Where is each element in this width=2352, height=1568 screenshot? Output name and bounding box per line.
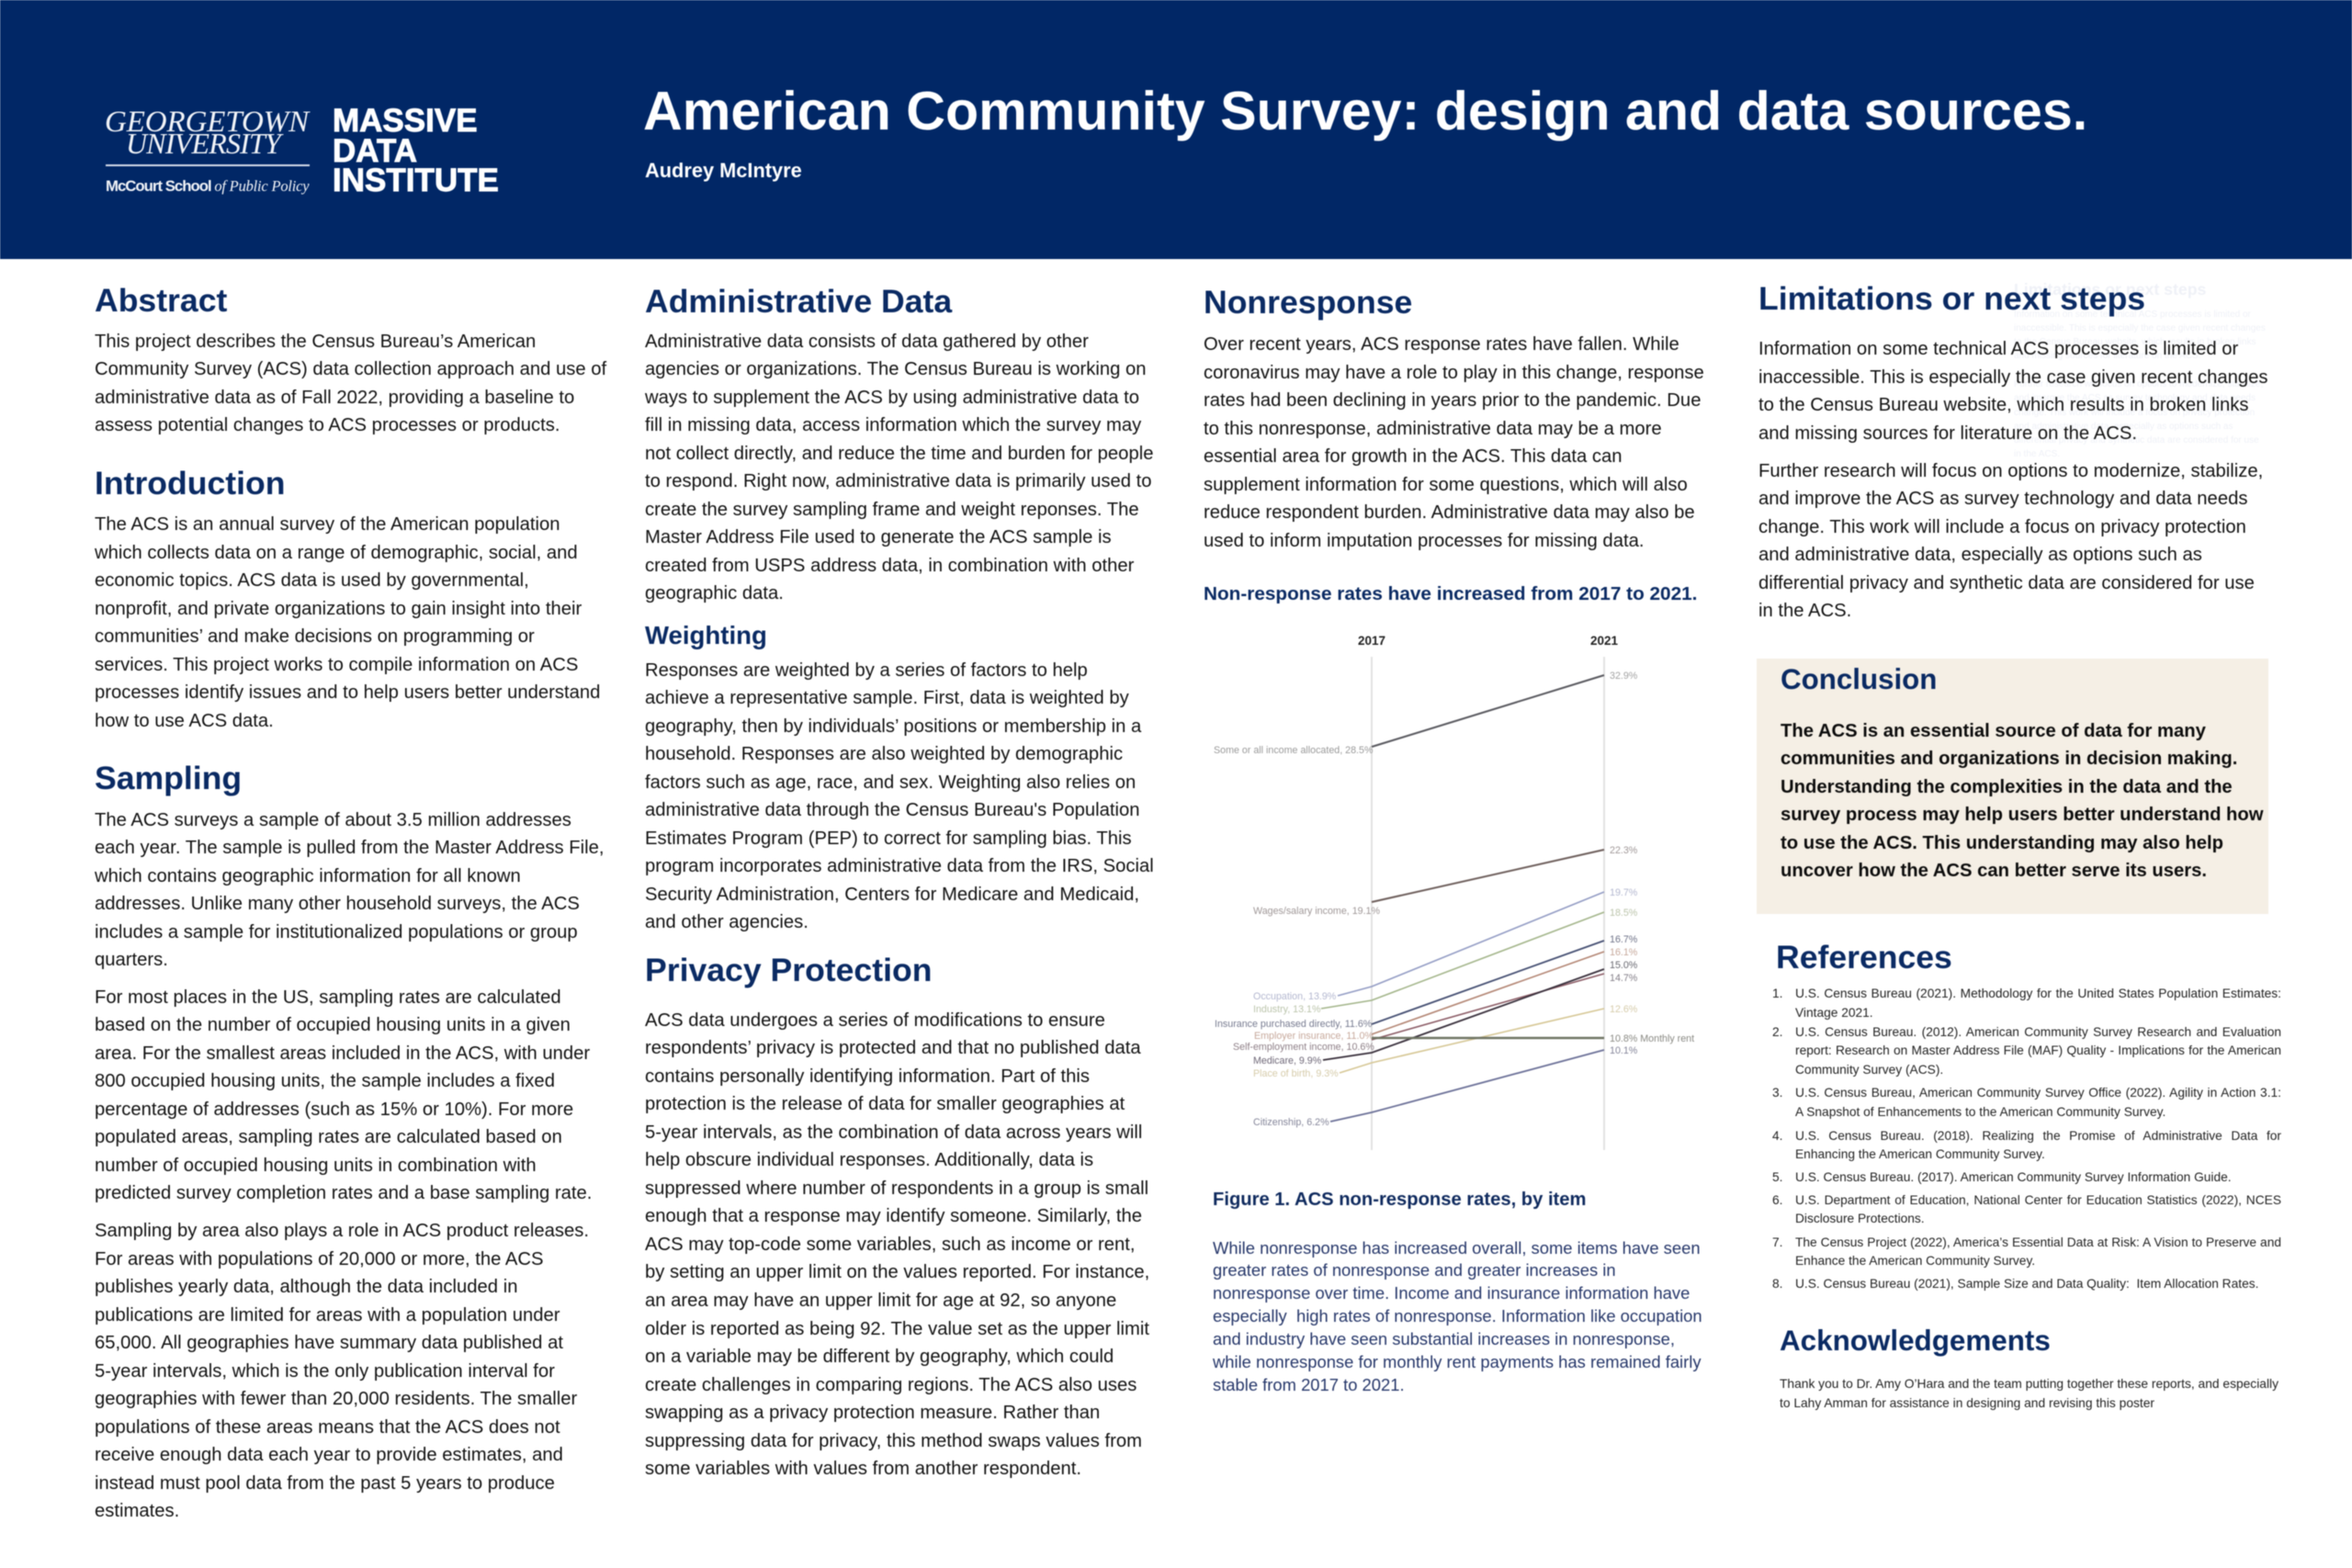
reference 2: 2.: [1772, 1025, 1782, 1038]
chart heading: Non-response rates have increased from 2017 to 2021.: [1204, 583, 1697, 604]
text: abstract: administrative data as of Fall 2022, providing a baseline to: [95, 388, 574, 408]
reference 6: Disclosure Protections.: [1795, 1212, 1925, 1225]
reference 2: U.S. Census Bureau. (2012). American Community Survey Research and Evaluation: [1795, 1025, 2281, 1038]
text: privacy protection: suppressed where number of respondents in a group is small: [645, 1179, 1148, 1199]
text: nonresponse: supplement information for some questions, which will also: [1204, 475, 1688, 495]
text: sampling paragraph 1: which contains geographic information for all known: [95, 866, 521, 886]
text: sampling paragraph 3: populations of these areas means that the ACS does not: [95, 1417, 560, 1438]
text: nonresponse: [1204, 334, 1704, 551]
text: conclusion: communities and organizations in decision making.: [1781, 749, 2237, 769]
text: conclusion: Understanding the complexities in the data and the: [1781, 777, 2233, 797]
text: limitations paragraph 2: differential privacy and synthetic data are considered for use: [1758, 573, 2255, 593]
text: administrative data: agencies or organizations. The Census Bureau is working on: [645, 359, 1147, 379]
reference 7: [1772, 1235, 2281, 1269]
heading: Conclusion: Conclusion: [1781, 663, 1937, 695]
text: privacy protection: enough that a response may identify someone. Similarly, the: [645, 1206, 1142, 1226]
series: occupation: Occupation, 13.9%: [1253, 991, 1337, 1002]
heading: Abstract: Abstract: [95, 282, 227, 319]
text: introduction: how to use ACS data.: [95, 711, 274, 731]
text: nonresponse: to this nonresponse, administrative data may be a more: [1204, 419, 1662, 439]
text: sampling paragraph 1: addresses. Unlike many other household surveys, the ACS: [95, 894, 580, 914]
reference 1: U.S. Census Bureau (2021). Methodology for the United States Population Estimates:: [1795, 987, 2281, 1000]
heading: Acknowledgements: Acknowledgements: [1780, 1325, 2051, 1357]
series: some or all income allocated: [1214, 671, 1638, 756]
text: acknowledgements: [1779, 1377, 2278, 1411]
text: weighting: administrative data through the Census Bureau's Population: [645, 800, 1140, 820]
text: administrative data: geographic data.: [645, 583, 784, 604]
series: self-employment income: [1233, 973, 1638, 1053]
faint ghost text behind limitations: and administrative data, especially as options such as: [2014, 422, 2233, 432]
faint ghost text behind limitations: Information on some technical ACS processes is limited or: [2014, 309, 2251, 320]
text: privacy protection: respondents’ privacy is protected and that no published data: [645, 1038, 1141, 1058]
text: conclusion: [1780, 720, 2264, 881]
text: introduction: processes identify issues and to help users better understand: [95, 682, 600, 703]
text: sampling paragraph 3: receive enough data each year to provide estimates, and: [95, 1445, 563, 1465]
slope chart: non-response rates 2017 to 2021: 2021: [1590, 634, 1619, 648]
series: occupation: 19.7%: [1610, 887, 1638, 898]
text: weighting: Responses are weighted by a series of factors to help: [645, 660, 1088, 680]
text: sampling paragraph 2: 800 occupied housing units, the sample includes a fixed: [95, 1071, 555, 1091]
faint ghost text behind limitations: and improve the ACS as survey technology and data needs: [2014, 393, 2256, 403]
text: conclusion: uncover how the ACS can better serve its users.: [1781, 861, 2207, 881]
text: administrative data: fill in missing data, access information which the survey may: [645, 415, 1141, 435]
series: place of birth: 12.6%: [1610, 1004, 1638, 1015]
heading: Sampling: Sampling: [95, 760, 242, 796]
series: employer insurance: Employer insurance, 11.0%: [1254, 1031, 1374, 1042]
heading: Privacy Protection: Privacy Protection: [645, 952, 932, 988]
text: introduction: nonprofit, and private organizations to gain insight into their: [95, 599, 582, 619]
logo: Massive Data Institute: MASSIVE: [333, 103, 478, 139]
text: sampling paragraph 3: instead must pool data from the past 5 years to produce: [95, 1473, 555, 1494]
text: limitations paragraph 1: and missing sources for literature on the ACS.: [1758, 423, 2137, 444]
text: nonresponse: Over recent years, ACS response rates have fallen. While: [1204, 334, 1679, 355]
text: sampling paragraph 3: [95, 1221, 589, 1521]
text: weighting: and other agencies.: [645, 912, 808, 932]
text: sampling paragraph 3: publishes yearly data, although the data included in: [95, 1277, 517, 1297]
series: employer insurance: [1254, 947, 1638, 1042]
panel: conclusion: [1757, 659, 2268, 914]
reference 1: 1.: [1772, 987, 1782, 1000]
series: employer insurance: 16.1%: [1610, 947, 1638, 958]
text: conclusion: survey process may help users better understand how: [1781, 805, 2264, 825]
series: wages/salary income: [1253, 845, 1638, 917]
text: introduction: which collects data on a range of demographic, social, and: [95, 543, 578, 563]
text: sampling paragraph 2: populated areas, sampling rates are calculated based on: [95, 1127, 562, 1147]
text: introduction: economic topics. ACS data is used by governmental,: [95, 570, 529, 591]
reference 3: [1772, 1086, 2281, 1120]
series: self-employment income: Self-employment income, 10.6%: [1233, 1042, 1374, 1053]
series: some or all income allocated: 32.9%: [1610, 671, 1638, 682]
text: weighting: Security Administration, Centers for Medicare and Medicaid,: [645, 885, 1139, 905]
reference 5: U.S. Census Bureau. (2017). American Community Survey Information Guide.: [1795, 1170, 2232, 1184]
series: place of birth: Place of birth, 9.3%: [1253, 1068, 1339, 1079]
reference 2: report: Research on Master Address File (MAF) Quality - Implications for the American: [1795, 1043, 2281, 1057]
reference 3: U.S. Census Bureau, American Community Survey Office (2022). Agility in Action 3.1:: [1795, 1086, 2281, 1100]
text: sampling paragraph 1: each year. The sample is pulled from the Master Address File,: [95, 838, 605, 858]
reference 4: Enhancing the American Community Survey.: [1795, 1147, 2045, 1161]
figure caption: Figure 1. ACS non-response rates, by item: [1213, 1190, 1586, 1210]
reference 7: The Census Project (2022), America’s Essential Data at Risk: A Vision to Preserve and: [1795, 1235, 2281, 1249]
text: nonresponse: rates had been declining in years prior to the pandemic. Due: [1204, 390, 1701, 411]
text: sampling paragraph 3: For areas with populations of 20,000 or more, the ACS: [95, 1249, 544, 1269]
reference 3: 3.: [1772, 1086, 1782, 1100]
text: sampling paragraph 1: quarters.: [95, 950, 168, 970]
series: insurance purchased directly: Insurance purchased directly, 11.6%: [1215, 1019, 1373, 1030]
text: privacy protection: ACS may top-code some variables, such as income or rent,: [645, 1235, 1135, 1255]
reference 4: U.S. Census Bureau. (2018). Realizing the Promise of Administrative Data for: [1795, 1128, 2281, 1143]
logo: Georgetown University McCourt School: GEORGETOWN: [105, 106, 309, 139]
reference 6: 6.: [1772, 1192, 1782, 1207]
title: American Community Survey: design and data sources.: [643, 80, 2087, 141]
heading: Nonresponse: Nonresponse: [1204, 284, 1412, 321]
text: limitations paragraph 1: [1758, 339, 2268, 444]
text: acknowledgements: to Lahy Amman for assistance in designing and revising this poster: [1780, 1396, 2154, 1410]
text: sampling paragraph 1: includes a sample for institutionalized populations or group: [95, 922, 578, 942]
faint ghost text behind limitations: Further research will focus on options to modernize, stabilize,: [2014, 379, 2263, 389]
series: place of birth: [1253, 1004, 1638, 1079]
text: sampling paragraph 2: area. For the smallest areas included in the ACS, with under: [95, 1043, 590, 1064]
text: abstract: [94, 331, 607, 435]
text: administrative data: Administrative data consists of data gathered by other: [645, 331, 1089, 351]
text: privacy protection: suppressing data for privacy, this method swaps values from: [645, 1431, 1142, 1451]
reference 8: 8.: [1772, 1277, 1782, 1290]
author: Audrey McIntyre: [645, 158, 802, 182]
text: sampling paragraph 1: The ACS surveys a sample of about 3.5 million addresses: [95, 810, 571, 830]
reference 3: A Snapshot of Enhancements to the American Community Survey.: [1795, 1105, 2165, 1119]
reference 1: Vintage 2021.: [1795, 1006, 1873, 1020]
faint ghost text behind limitations: Limitations or next steps: [2014, 280, 2206, 299]
text: limitations paragraph 1: Information on some technical ACS processes is limited or: [1758, 339, 2238, 359]
series: medicare: Medicare, 9.9%: [1253, 1055, 1322, 1066]
text: conclusion: to use the ACS. This understanding may also help: [1781, 833, 2223, 853]
faint ghost text behind limitations: to the Census Bureau website, which results in broken links: [2014, 337, 2256, 347]
reference 4: 4.: [1772, 1128, 1782, 1143]
heading: Limitations or next steps: Limitations or next steps: [1758, 280, 2145, 317]
logo: Massive Data Institute: DATA: [333, 132, 417, 169]
text: weighting: household. Responses are also weighted by demographic: [645, 744, 1123, 764]
faint ghost text behind limitations: [2014, 280, 2266, 459]
faint ghost text behind limitations: differential privacy and synthetic data are considered for use: [2014, 435, 2259, 446]
series: medicare: 15.0%: [1610, 960, 1638, 971]
text: sampling paragraph 3: 5-year intervals, which is the only publication interval for: [95, 1361, 555, 1382]
heading: References: References: [1776, 939, 1952, 976]
text: conclusion: The ACS is an essential source of data for many: [1781, 720, 2206, 740]
series: occupation: [1253, 887, 1638, 1002]
text: administrative data: to respond. Right now, administrative data is primarily used to: [645, 471, 1152, 491]
series: self-employment income: 14.7%: [1610, 973, 1638, 984]
text: privacy protection: contains personally identifying information. Part of this: [645, 1066, 1090, 1087]
text: sampling paragraph 3: geographies with fewer than 20,000 residents. The smaller: [95, 1389, 577, 1409]
logo: Massive Data Institute: [333, 103, 499, 198]
text: sampling paragraph 3: 65,000. All geographies have summary data published at: [95, 1333, 563, 1353]
slope chart: non-response rates 2017 to 2021: [1214, 634, 1694, 1150]
text: limitations paragraph 1: inaccessible. This is especially the case given recent changes: [1758, 367, 2268, 388]
reference 5: 5.: [1772, 1170, 1782, 1184]
text: limitations paragraph 2: in the ACS.: [1758, 601, 1851, 621]
text: administrative data: [644, 331, 1154, 604]
series: insurance purchased directly: [1215, 934, 1638, 1030]
heading: Administrative Data: Administrative Data: [645, 283, 952, 320]
series: industry: [1253, 908, 1638, 1015]
text: introduction: The ACS is an annual survey of the American population: [95, 514, 560, 535]
heading: Weighting: Weighting: [645, 621, 767, 649]
text: privacy protection: on a variable may be different by geography, which could: [645, 1347, 1114, 1367]
text: privacy protection: some variables with values from another respondent.: [645, 1459, 1081, 1479]
text: abstract: This project describes the Census Bureau’s American: [95, 331, 536, 351]
text: limitations paragraph 2: and administrative data, especially as options such as: [1758, 545, 2202, 565]
reference 6: [1771, 1192, 2282, 1225]
logo: Georgetown University McCourt School: McCourt School of Public Policy: [106, 177, 309, 195]
text: privacy protection: by setting an upper limit on the values reported. For instance,: [645, 1262, 1149, 1282]
text: introduction: communities’ and make decisions on programming or: [95, 626, 535, 647]
text: administrative data: created from USPS address data, in combination with other: [645, 556, 1134, 576]
text: sampling paragraph 2: For most places in the US, sampling rates are calculated: [95, 987, 561, 1007]
text: weighting: achieve a representative sample. First, data is weighted by: [645, 688, 1129, 708]
text: sampling paragraph 2: [95, 987, 592, 1203]
logo: Georgetown University McCourt School: UNIVERSITY: [126, 127, 280, 160]
faint ghost text behind limitations: and missing sources for literature on the ACS.: [2014, 351, 2200, 361]
text: sampling paragraph 3: publications are limited for areas with a population under: [95, 1305, 560, 1325]
text: administrative data: create the survey sampling frame and weight reponses. The: [645, 500, 1139, 520]
text: introduction: services. This project works to compile information on ACS: [95, 655, 578, 675]
text: sampling paragraph 2: based on the number of occupied housing units in a given: [95, 1015, 571, 1035]
text: limitations paragraph 2: change. This work will include a focus on privacy protection: [1758, 517, 2246, 537]
reference 2: Community Survey (ACS).: [1795, 1063, 1943, 1077]
text: administrative data: Master Address File used to generate the ACS sample is: [645, 527, 1112, 547]
text: weighting: geography, then by individuals’ positions or membership in a: [645, 716, 1141, 737]
text: privacy protection: an area may have an upper limit for age at 92, so anyone: [645, 1291, 1116, 1311]
series: wages/salary income: 22.3%: [1610, 845, 1638, 856]
text: abstract: Community Survey (ACS) data collection approach and use of: [95, 359, 606, 379]
series: citizenship: [1253, 1045, 1638, 1128]
heading: Introduction: Introduction: [95, 465, 285, 502]
text: administrative data: ways to supplement the ACS by using administrative data to: [645, 388, 1139, 408]
text: privacy protection: swapping as a privacy protection measure. Rather than: [645, 1403, 1100, 1423]
text: sampling paragraph 3: Sampling by area also plays a role in ACS product releases.: [95, 1221, 589, 1241]
text: sampling paragraph 2: predicted survey completion rates and a base sampling rate.: [95, 1183, 592, 1203]
text: limitations paragraph 1: to the Census Bureau website, which results in broken links: [1758, 395, 2249, 415]
text: limitations paragraph 2: [1758, 461, 2263, 621]
series: industry: 18.5%: [1610, 908, 1638, 919]
reference 4: [1771, 1128, 2282, 1162]
text: weighting: factors such as age, race, and sex. Weighting also relies on: [645, 773, 1136, 793]
text: sampling paragraph 1: [94, 810, 605, 970]
slope chart: non-response rates 2017 to 2021: 2017: [1358, 634, 1385, 648]
series: citizenship: Citizenship, 6.2%: [1253, 1117, 1329, 1128]
text: sampling paragraph 2: percentage of addresses (such as 15% or 10%). For more: [95, 1100, 573, 1120]
reference 8: U.S. Census Bureau (2021), Sample Size and Data Quality: Item Allocation Rates.: [1795, 1277, 2258, 1290]
faint ghost text behind limitations: inaccessible. This is especially the case given recent changes: [2014, 323, 2266, 333]
series: monthly rent: 10.8% Monthly rent: [1610, 1033, 1694, 1044]
logo: Georgetown University McCourt School: [105, 106, 311, 195]
text: nonresponse: essential area for growth in the ACS. This data can: [1204, 446, 1623, 467]
logo: Massive Data Institute: INSTITUTE: [333, 163, 499, 198]
text: nonresponse: reduce respondent burden. Administrative data may also be: [1204, 502, 1695, 523]
faint ghost text behind limitations: in the ACS.: [2014, 449, 2060, 459]
text: privacy protection: older is reported as being 92. The value set as the upper limit: [645, 1319, 1149, 1339]
reference 6: U.S. Department of Education, National Center for Education Statistics (2022), NCES: [1795, 1192, 2281, 1207]
series: some or all income allocated: Some or all income allocated, 28.5%: [1214, 745, 1374, 756]
series: citizenship: 10.1%: [1610, 1045, 1638, 1056]
text: weighting: [645, 660, 1154, 932]
text: privacy protection: help obscure individual responses. Additionally, data is: [645, 1150, 1093, 1170]
text: sampling paragraph 3: estimates.: [95, 1501, 179, 1521]
series: medicare: [1253, 960, 1638, 1066]
text: introduction: [94, 514, 600, 731]
text: nonresponse: coronavirus may have a role to play in this change, response: [1204, 363, 1704, 383]
header banner: [0, 0, 2352, 259]
reference 2: [1772, 1025, 2281, 1077]
text: privacy protection: [645, 1010, 1150, 1479]
faint ghost text behind limitations: change. This work will include a focus on privacy protection: [2014, 408, 2255, 418]
text: acknowledgements: Thank you to Dr. Amy O’Hara and the team putting together these reports, and especially: [1780, 1377, 2278, 1391]
text: administrative data: not collect directly, and reduce the time and burden for people: [645, 444, 1153, 464]
text: nonresponse: used to inform imputation processes for missing data.: [1204, 531, 1644, 551]
text: privacy protection: protection is the release of data for smaller geographies at: [645, 1094, 1125, 1114]
text: weighting: program incorporates administrative data from the IRS, Social: [645, 856, 1154, 876]
text: privacy protection: create challenges in comparing regions. The ACS also uses: [645, 1375, 1136, 1395]
text: weighting: Estimates Program (PEP) to correct for sampling bias. This: [645, 829, 1132, 849]
text: abstract: assess potential changes to ACS processes or products.: [95, 415, 560, 435]
series: insurance purchased directly: 16.7%: [1610, 934, 1638, 945]
text: sampling paragraph 2: number of occupied housing units in combination with: [95, 1156, 537, 1176]
text: privacy protection: ACS data undergoes a series of modifications to ensure: [645, 1010, 1105, 1031]
reference 7: Enhance the American Community Survey.: [1795, 1254, 2035, 1268]
series: industry: Industry, 13.1%: [1253, 1004, 1321, 1015]
series: wages/salary income: Wages/salary income, 19.1%: [1253, 906, 1381, 917]
reference 1: [1772, 987, 2281, 1021]
text: privacy protection: 5-year intervals, as the combination of data across years will: [645, 1122, 1142, 1143]
reference 7: 7.: [1772, 1235, 1782, 1249]
text: limitations paragraph 2: Further research will focus on options to modernize, stabilize,: [1758, 461, 2263, 481]
text: figure description: While nonresponse has increased overall, some items have seen greater rates of nonresponse and greater increases in nonresponse over time. Income and insurance information have especially high rates of nonresponse. Information like occupation and industry have seen substantial increases in nonresponse, while nonresponse for monthly rent payments has remained fairly stable from 2017 to 2021.: [1213, 1238, 1702, 1394]
text: limitations paragraph 2: and improve the ACS as survey technology and data needs: [1758, 489, 2247, 509]
